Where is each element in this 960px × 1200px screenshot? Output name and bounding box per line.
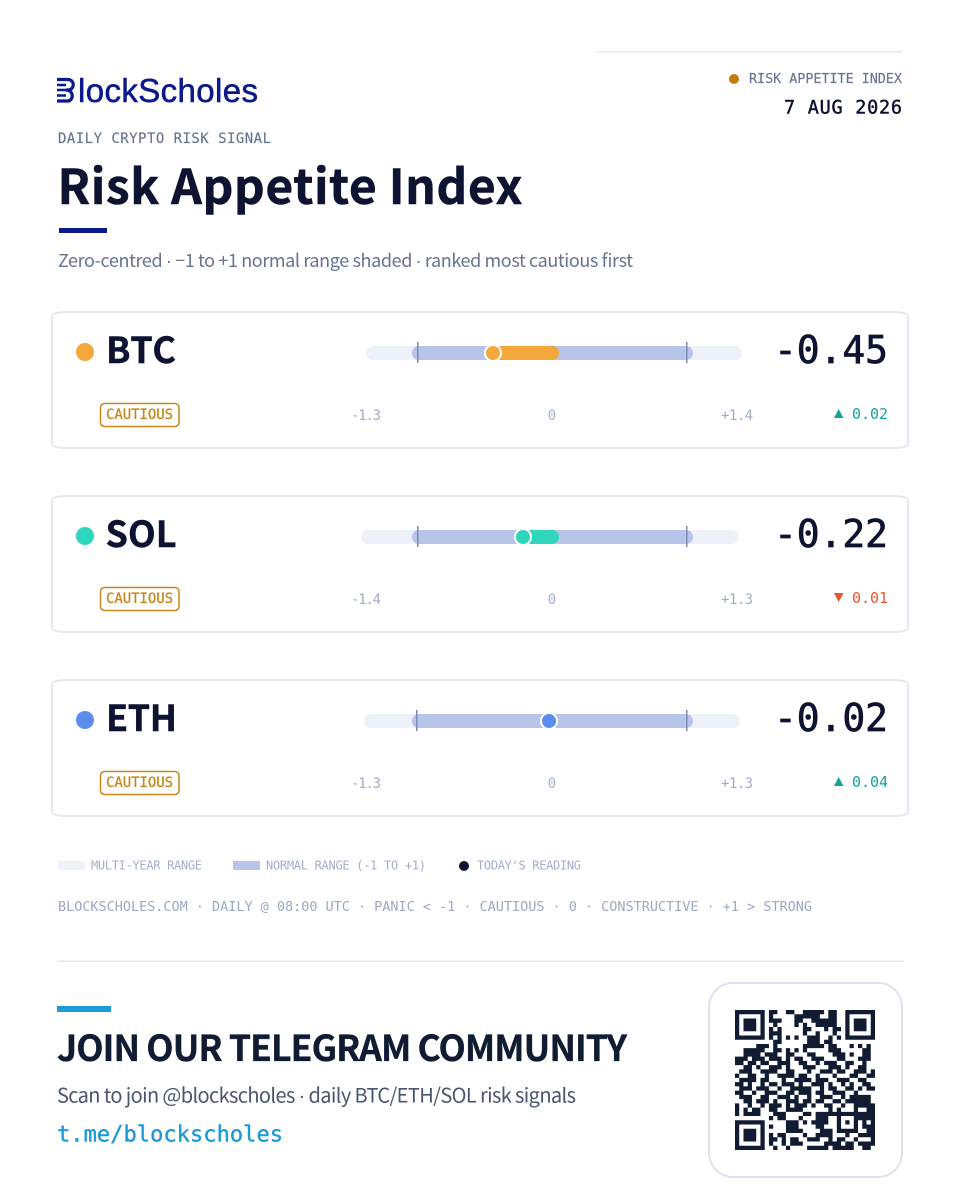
SOL range bar: [361, 526, 739, 547]
ETH name: ETH: [106, 690, 177, 742]
SOL change: [834, 589, 888, 607]
BTC change: [834, 405, 888, 423]
BTC axis labels: [351, 408, 753, 424]
legend: [58, 858, 581, 872]
icon: BTC dot: [76, 343, 94, 361]
BTC badge: CAUTIOUS: [106, 407, 173, 423]
QR code: [735, 1010, 875, 1150]
ETH badge: [100, 772, 179, 794]
SOL name: SOL: [106, 506, 176, 558]
SOL axis labels: 0: [548, 592, 556, 608]
date: 7 AUG 2026: [784, 98, 902, 118]
ETH change: 0.04: [852, 773, 888, 791]
logo: BlockScholes: lockScholes: [78, 72, 258, 109]
BTC value: -0.45: [774, 328, 888, 372]
SOL badge: CAUTIOUS: [106, 591, 173, 607]
panel: ETH: [52, 680, 908, 816]
BTC axis labels: 0: [548, 408, 556, 424]
panel: BTC: [52, 312, 908, 448]
index tag: RISK APPETITE INDEX: [749, 71, 902, 87]
title underline: [59, 228, 107, 233]
icon: SOL dot: [76, 527, 94, 545]
legend: TODAY'S READING: [477, 858, 581, 872]
ETH range bar: [364, 710, 740, 731]
icon: ETH dot: [76, 711, 94, 729]
SOL axis labels: -1.4: [351, 592, 381, 608]
BTC axis labels: -1.3: [351, 408, 381, 424]
SOL value: -0.22: [774, 512, 888, 556]
subtitle: Zero-centred · −1 to +1 normal range shaded · ranked most cautious first: [58, 247, 633, 273]
title: Risk Appetite Index: [58, 148, 523, 218]
ETH axis labels: [351, 776, 753, 792]
SOL change: 0.01: [852, 589, 888, 607]
footer note: BLOCKSCHOLES.COM · DAILY @ 08:00 UTC · PANIC < -1 · CAUTIOUS · 0 · CONSTRUCTIVE · +1 > STRONG: [58, 899, 812, 915]
panel: SOL: [52, 496, 908, 632]
ETH change: [834, 773, 888, 791]
legend: NORMAL RANGE (-1 TO +1): [266, 858, 426, 872]
eyebrow: DAILY CRYPTO RISK SIGNAL: [58, 131, 271, 147]
ETH axis labels: +1.3: [721, 776, 753, 792]
BTC change: 0.02: [852, 405, 888, 423]
telegram accent bar: [57, 1006, 111, 1012]
SOL badge: [100, 588, 179, 610]
telegram subtext: Scan to join @blockscholes · daily BTC/ETH/SOL risk signals: [57, 1080, 576, 1108]
QR card: [709, 983, 902, 1177]
BTC axis labels: +1.4: [721, 408, 753, 424]
ETH value: -0.02: [774, 696, 888, 740]
legend: MULTI-YEAR RANGE: [91, 858, 202, 872]
ETH badge: CAUTIOUS: [106, 775, 173, 791]
telegram heading: JOIN OUR TELEGRAM COMMUNITY: [57, 1021, 627, 1072]
SOL axis labels: [351, 592, 753, 608]
BTC badge: [100, 404, 179, 426]
telegram link: t.me/blockscholes: [57, 1122, 283, 1148]
BTC range bar: [366, 342, 742, 363]
SOL axis labels: +1.3: [721, 592, 753, 608]
BTC name: BTC: [106, 322, 176, 374]
ETH axis labels: -1.3: [351, 776, 381, 792]
ETH axis labels: 0: [548, 776, 556, 792]
